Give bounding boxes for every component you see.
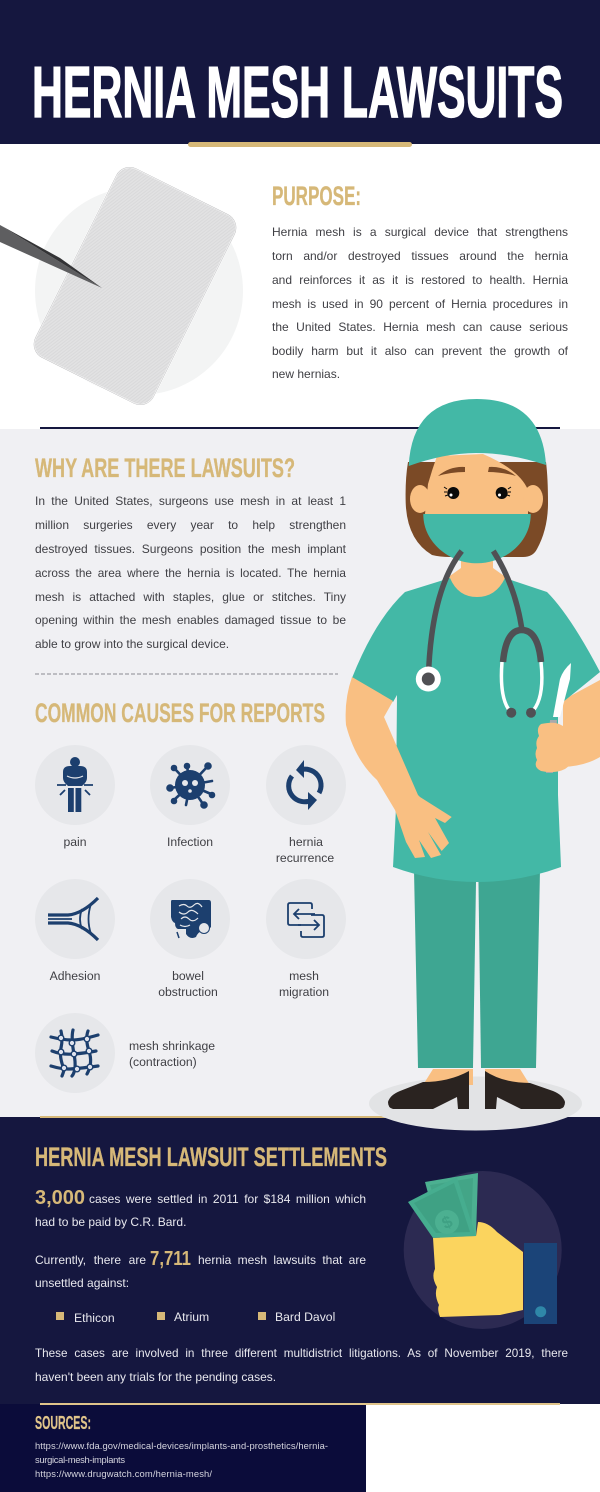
left arm and hand <box>346 677 452 858</box>
list: defendants: Atrium <box>174 1310 209 1324</box>
floor shadow <box>369 1076 582 1130</box>
illustration: surgeon <box>346 399 600 1130</box>
list: defendants <box>56 1310 335 1325</box>
text block: purpose: torn and/or destroyed tissues around the hernia <box>272 249 568 263</box>
scalpel <box>553 663 571 717</box>
label: mesh shrinkage: (contraction) <box>129 1055 197 1069</box>
text block: pending cases <box>35 1347 568 1384</box>
text block: purpose <box>272 225 568 381</box>
label: bowel obstruction: bowel <box>172 969 204 983</box>
stethoscope <box>428 551 462 679</box>
text block: settlement paragraph two: unsettled against: <box>35 1276 129 1290</box>
panel: sources <box>0 1403 560 1492</box>
panel: settlements background <box>0 1117 600 1404</box>
right hand fist <box>536 723 573 772</box>
text block: pending cases: haven't been any trials for the pending cases. <box>35 1370 276 1384</box>
text block: purpose: Hernia mesh is a surgical device that strengthens <box>272 225 568 239</box>
eyebrows <box>438 467 516 476</box>
icon: migration <box>266 879 346 959</box>
ankles <box>423 1069 530 1085</box>
trousers <box>414 870 476 1068</box>
hair <box>406 462 548 557</box>
list: defendants: Bard Davol <box>275 1310 335 1324</box>
illustration: hand with money: $ <box>439 1212 456 1233</box>
illustration: hand with money <box>404 1171 562 1329</box>
header band <box>0 0 600 144</box>
label: adhesion: Adhesion <box>50 969 100 983</box>
text block: settlement paragraph one: had to be paid by C.R. Bard. <box>35 1215 186 1229</box>
text block: settlement paragraph two <box>35 1253 366 1290</box>
heading: common causes: COMMON CAUSES FOR REPORTS <box>35 698 325 728</box>
text block: sources: https://www.drugwatch.com/hernia-mesh/ <box>35 1468 212 1479</box>
heading: why lawsuits: WHY ARE THERE LAWSUITS? <box>35 453 295 483</box>
text block: purpose: and reinforces it as it is restored to health. Hernia <box>272 273 568 287</box>
text block: pending cases: These cases are involved in three different multidistrict litigations. As of November 2019, there <box>35 1347 568 1360</box>
text block: sources: surgical-mesh-implants <box>35 1454 125 1465</box>
text block: purpose: the United States. Hernia mesh can cause serious <box>272 320 568 334</box>
icon: adhesion <box>35 879 115 959</box>
shoes <box>388 1071 469 1109</box>
heading: purpose: PURPOSE: <box>272 181 361 211</box>
face <box>425 454 528 514</box>
heading: sources: SOURCES: <box>35 1413 91 1433</box>
panel: grey background <box>0 429 600 1117</box>
text block: why lawsuits: mesh is attached with staples, glue or stitches. Tiny <box>35 590 346 604</box>
text block: why lawsuits: destroyed tissues. Surgeons position the mesh implant <box>35 542 346 556</box>
icon: recurrence <box>266 745 346 825</box>
text block: purpose: bodily harm but it also can prevent the growth of <box>272 344 568 358</box>
text block: why lawsuits: opening within the mesh enables damaged tissue to be <box>35 613 346 627</box>
label: hernia recurrence <box>276 835 334 865</box>
text block: why lawsuits: million surgeries every year to help strengthen <box>35 518 346 532</box>
text block: settlement paragraph two: hernia mesh lawsuits that are <box>198 1253 366 1267</box>
right forearm <box>563 680 600 767</box>
icon: infection <box>150 745 230 825</box>
icon: pain <box>35 745 115 825</box>
text block: purpose: new hernias. <box>272 367 340 381</box>
label: mesh migration <box>279 969 329 999</box>
label: mesh shrinkage <box>129 1039 215 1069</box>
label: mesh migration: migration <box>279 985 329 999</box>
icon: mesh shrinkage <box>35 1013 115 1093</box>
heading: settlements: HERNIA MESH LAWSUIT SETTLEMENTS <box>35 1142 387 1172</box>
title underline <box>188 142 412 147</box>
illustration: surgical mesh with tweezers <box>0 162 243 410</box>
label: infection: Infection <box>167 835 213 849</box>
label: hernia recurrence: recurrence <box>276 851 334 865</box>
figure: 7,711: 7,711 <box>150 1248 191 1270</box>
cap <box>409 399 546 466</box>
text block: why lawsuits: across the area where the hernia is located. The hernia <box>35 566 346 580</box>
eyes <box>444 487 511 499</box>
text block: settlement paragraph two: Currently, there are <box>35 1253 146 1267</box>
label: hernia recurrence: hernia <box>289 835 323 849</box>
label: pain: pain <box>63 835 87 849</box>
mask <box>423 514 531 563</box>
label: bowel obstruction: obstruction <box>158 985 218 999</box>
label: bowel obstruction <box>158 969 218 999</box>
figure: 3,000: 3,000 <box>35 1187 85 1209</box>
scrub top <box>352 578 600 882</box>
text block: purpose: mesh is used in 90 percent of Hernia procedures in <box>272 297 568 311</box>
text block: why lawsuits <box>35 494 346 651</box>
text block: settlement paragraph one <box>35 1192 366 1229</box>
label: mesh shrinkage: mesh shrinkage <box>129 1039 215 1053</box>
text block: sources <box>35 1440 328 1479</box>
label: mesh migration: mesh <box>289 969 319 983</box>
text block: settlement paragraph one: cases were settled in 2011 for $184 million which <box>89 1192 366 1206</box>
text block: sources: https://www.fda.gov/medical-devices/implants-and-prosthetics/hernia- <box>35 1440 328 1451</box>
list: defendants: Ethicon <box>74 1311 115 1325</box>
text block: why lawsuits: In the United States, surgeons use mesh in at least 1 <box>35 494 346 508</box>
neck <box>447 560 507 598</box>
icon: bowel <box>150 879 230 959</box>
text block: why lawsuits: able to grow into the surgical device. <box>35 637 229 651</box>
